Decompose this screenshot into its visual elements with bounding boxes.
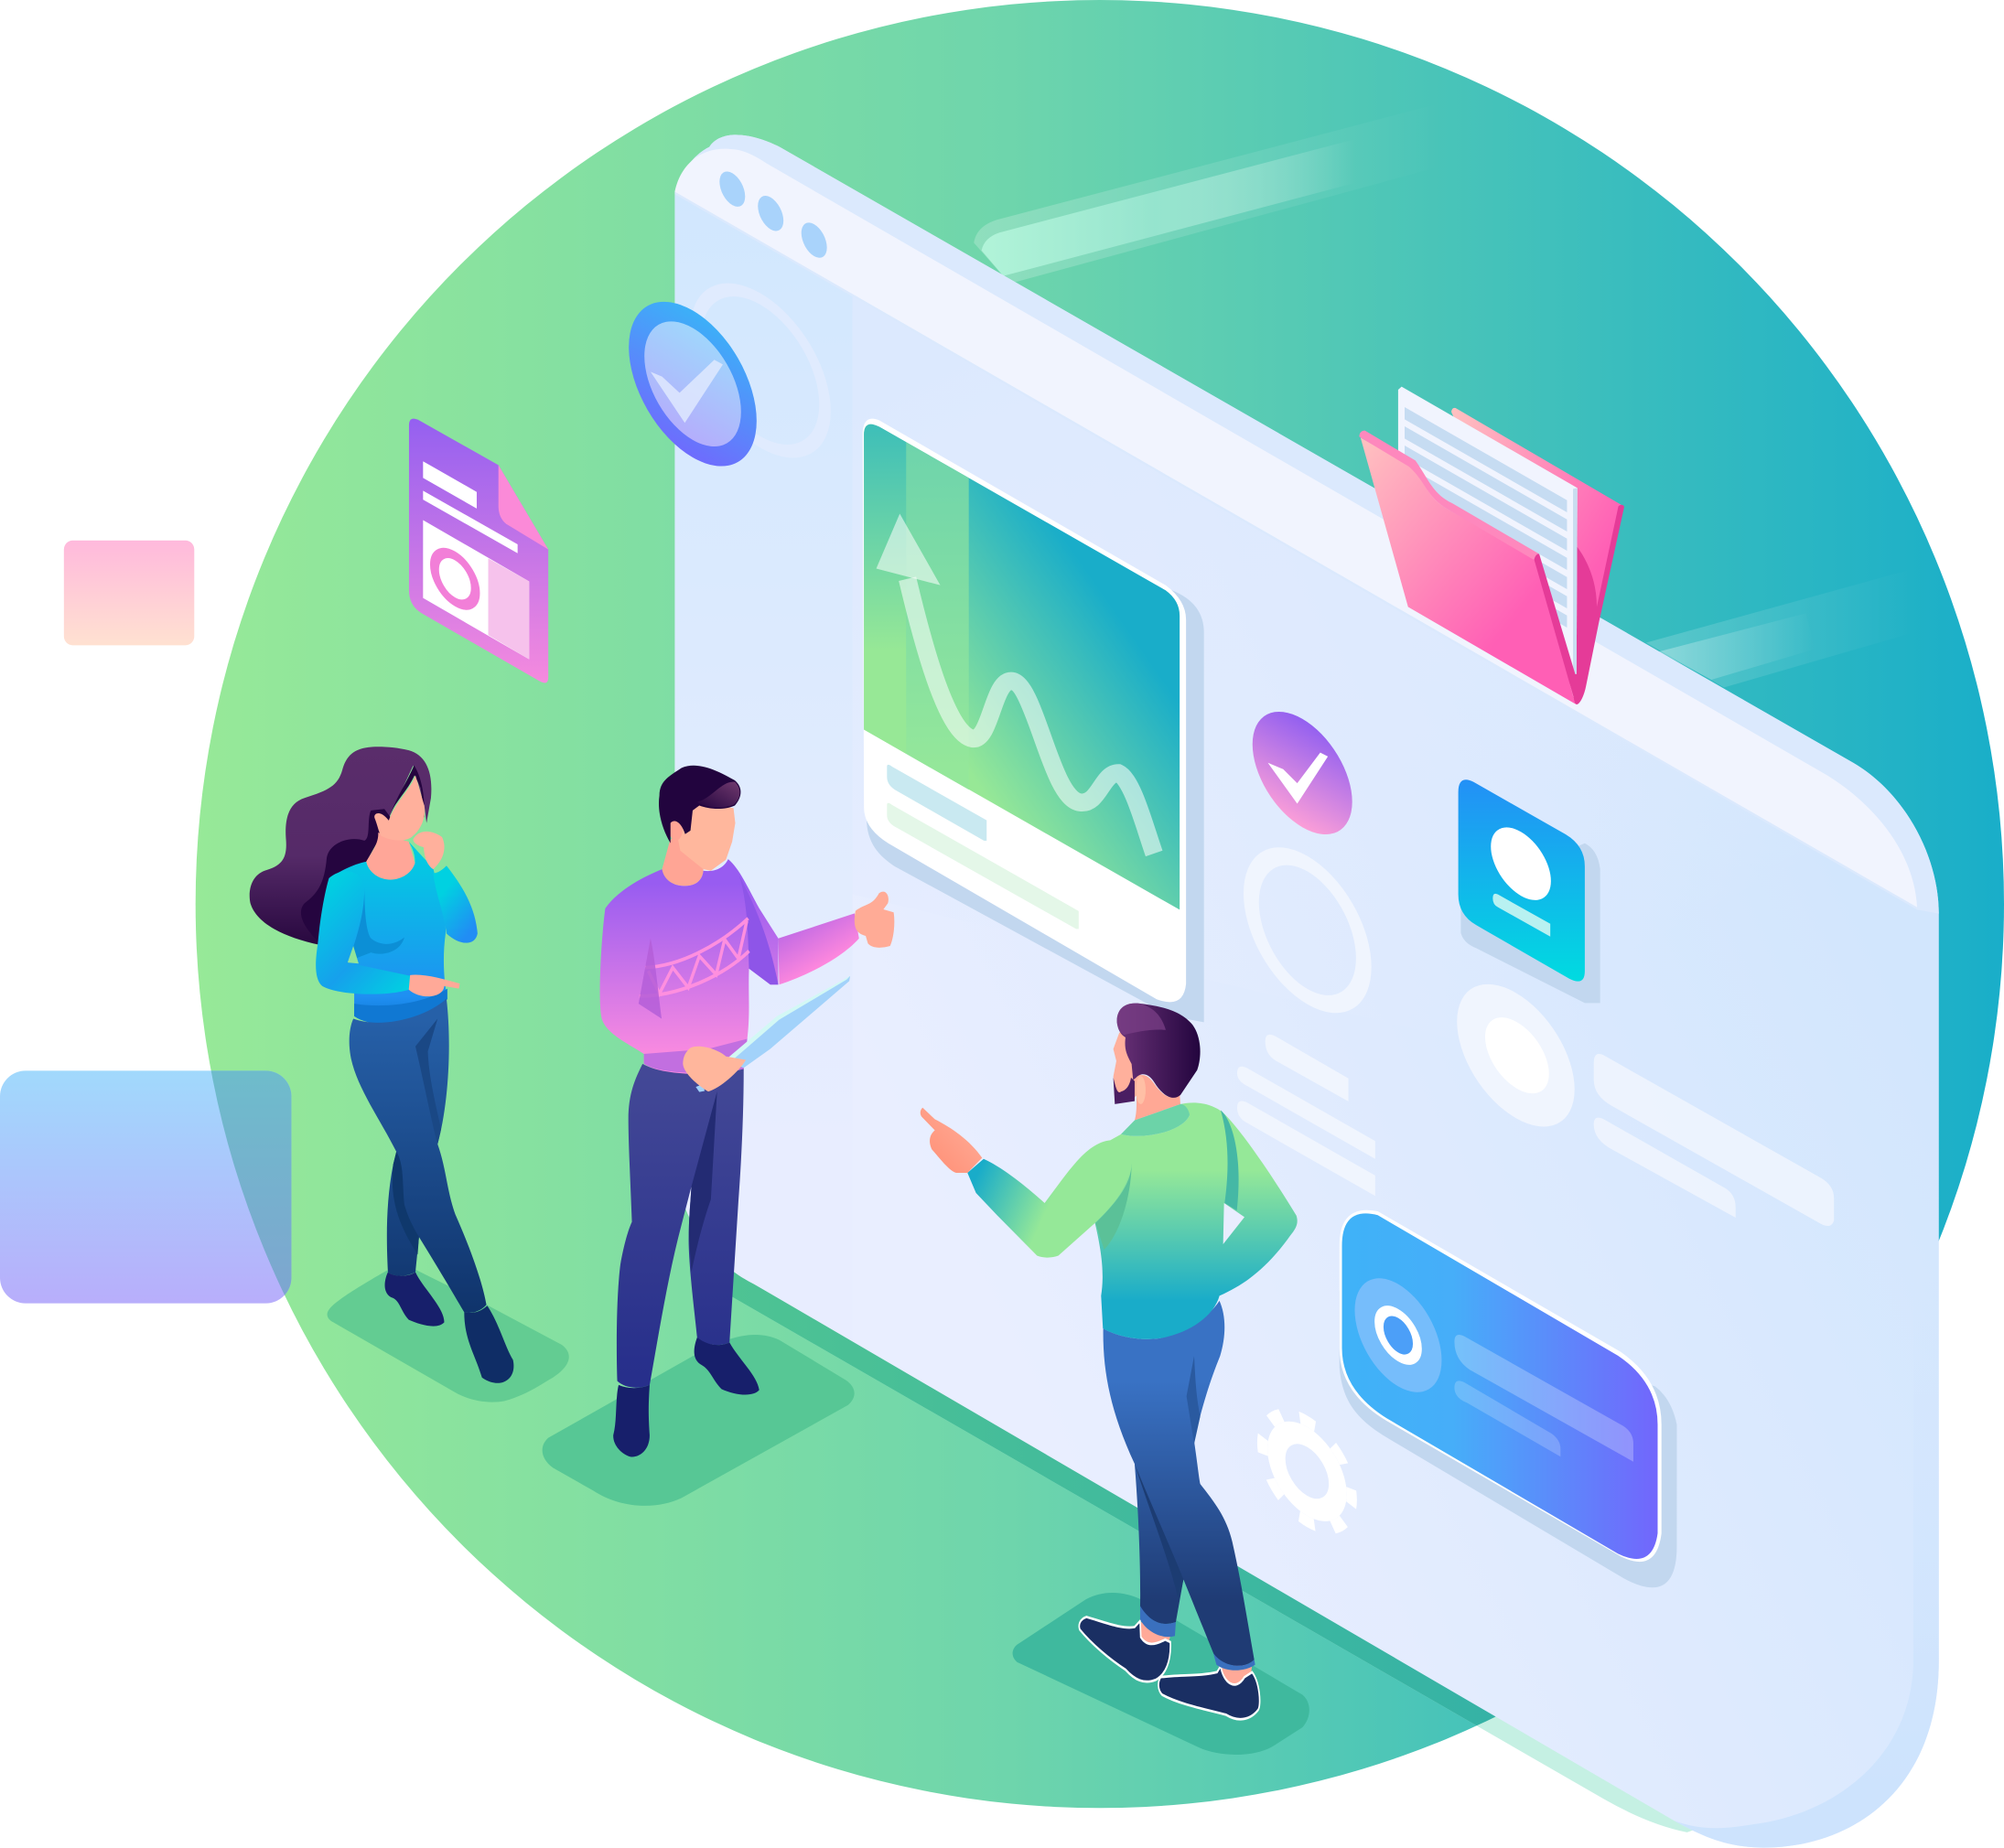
- trousers: [350, 999, 487, 1313]
- icon: pink folder: [1359, 387, 1624, 704]
- text line long: [423, 490, 518, 553]
- folder back: [1451, 408, 1622, 702]
- thumb hand: [855, 892, 894, 948]
- image card right: [489, 558, 529, 660]
- icon: check badge: [629, 262, 825, 494]
- icon: purple document: [409, 419, 548, 682]
- hair: [250, 747, 431, 945]
- image ring: [435, 544, 476, 614]
- card body: [863, 419, 1186, 1002]
- pointing arm: [967, 1140, 1132, 1258]
- sweater hem: [354, 989, 447, 1024]
- neck: [1135, 1075, 1180, 1120]
- paper edge: [1573, 488, 1578, 674]
- floor shadow: [543, 1335, 855, 1506]
- person: man with tablet: [543, 766, 894, 1506]
- sweater hem: [644, 1038, 748, 1073]
- shoe one: [1079, 1617, 1170, 1681]
- avatar head: [1491, 814, 1551, 913]
- ghost ring: [1251, 832, 1363, 1029]
- ear: [1136, 1076, 1146, 1104]
- caption bars: [887, 765, 986, 841]
- paper: [1398, 387, 1578, 674]
- back arm shadow: [1221, 1111, 1239, 1210]
- image card: [423, 520, 529, 660]
- folded corner: [499, 465, 548, 550]
- pink rounded square: [64, 541, 194, 645]
- window dots: [719, 166, 827, 263]
- neck: [663, 823, 704, 886]
- beard: [1114, 1078, 1135, 1104]
- shoe front foot: [695, 1338, 760, 1395]
- gear icon: [1263, 1395, 1352, 1547]
- shoe back foot: [613, 1385, 650, 1456]
- chart band one: [864, 424, 906, 754]
- sweater body: [1095, 1102, 1298, 1339]
- lower hand: [683, 1047, 746, 1091]
- shoe right: [464, 1305, 513, 1383]
- hair strand: [389, 766, 425, 819]
- ear: [669, 819, 683, 841]
- paper lines: [1405, 407, 1567, 628]
- hand pointing: [409, 975, 459, 996]
- person: woman: [250, 747, 569, 1402]
- panel top rim: [674, 134, 1939, 914]
- sleeve triangle: [639, 939, 662, 1019]
- text lines: [423, 461, 477, 509]
- shoe two: [1158, 1666, 1260, 1719]
- panel header bar: [674, 149, 1917, 908]
- floor shadow: man pointing: [1013, 1593, 1309, 1755]
- back leg shade: [393, 1152, 419, 1254]
- hair: [659, 766, 740, 843]
- panel upper tint: [853, 294, 1917, 1150]
- hair: [1117, 1004, 1201, 1098]
- avatar card: [1459, 779, 1600, 1003]
- cuff two: [1213, 1653, 1255, 1671]
- chart card: [863, 419, 1204, 1022]
- tablet: [724, 976, 850, 1068]
- ghost profile circle: [1457, 959, 1575, 1152]
- tablet edge: [724, 976, 850, 1064]
- background streak: lower: [1646, 570, 1910, 687]
- arm gap: [1223, 1203, 1244, 1244]
- card shadow: [867, 590, 1204, 1022]
- panel bottom rim: [1675, 1278, 1939, 1848]
- panel body: [674, 134, 1939, 1848]
- sweater: [329, 842, 447, 1024]
- trouser shade: [689, 1091, 717, 1273]
- blue profile card: [1340, 1210, 1676, 1587]
- folder spine: [1573, 505, 1624, 704]
- blue rounded rectangle: [0, 1070, 291, 1304]
- face: [675, 802, 736, 871]
- card border: [1340, 1210, 1662, 1562]
- caption bar two: [887, 803, 1079, 929]
- chart band two: [906, 442, 969, 790]
- card shadow: [1340, 1291, 1676, 1587]
- gap: [348, 946, 359, 963]
- browser window panel: [674, 134, 1939, 1848]
- sweater pattern: [640, 919, 749, 996]
- background streak: upper: [974, 97, 1489, 284]
- arm left: [316, 871, 411, 994]
- card body: [1342, 1213, 1657, 1559]
- card line short: [1454, 1381, 1560, 1456]
- neck: [366, 833, 415, 880]
- arm shadow: [1095, 1163, 1132, 1250]
- trouser crease: [415, 1019, 441, 1144]
- trouser crease: [1187, 1356, 1201, 1444]
- face: [1114, 1032, 1141, 1101]
- leg shade: [1135, 1464, 1183, 1601]
- icon: purple check: [1253, 690, 1352, 856]
- arm right: [433, 865, 478, 943]
- arrow head: [877, 513, 941, 586]
- face: [374, 776, 425, 841]
- cuffs: [1140, 1606, 1176, 1637]
- trousers: [617, 1064, 744, 1388]
- person: man pointing: [921, 1004, 1298, 1719]
- collar: [1121, 1104, 1190, 1136]
- arrow line: [908, 579, 1154, 854]
- chart area: [864, 424, 1180, 909]
- folder edge: [1535, 553, 1578, 704]
- sweater: [600, 859, 779, 1075]
- sweater fold: [349, 888, 404, 961]
- folder front: [1361, 437, 1575, 704]
- card avatar: [1354, 1259, 1441, 1412]
- hair highlight: [1117, 1004, 1166, 1035]
- skin ankles: [1141, 1622, 1252, 1686]
- pointing hand: [921, 1108, 982, 1173]
- panel sidebar: [674, 192, 853, 1340]
- sleeve shade: [739, 876, 779, 984]
- ghost text lines: [1237, 1035, 1375, 1196]
- avatar bar: [1492, 894, 1550, 937]
- hand chin: [414, 832, 445, 869]
- shoe left: [385, 1273, 444, 1327]
- hair shadow: [301, 809, 391, 943]
- tablet corner: [695, 1084, 705, 1092]
- ghost profile lines: [1594, 1054, 1834, 1226]
- floor shadow: [328, 1270, 569, 1402]
- panel ground shadow: [690, 1233, 1713, 1832]
- trousers: [1104, 1301, 1255, 1666]
- hair highlight: [697, 782, 739, 808]
- card lines: [1454, 1335, 1633, 1462]
- folder tab: [1359, 431, 1538, 561]
- forearm: [779, 913, 859, 984]
